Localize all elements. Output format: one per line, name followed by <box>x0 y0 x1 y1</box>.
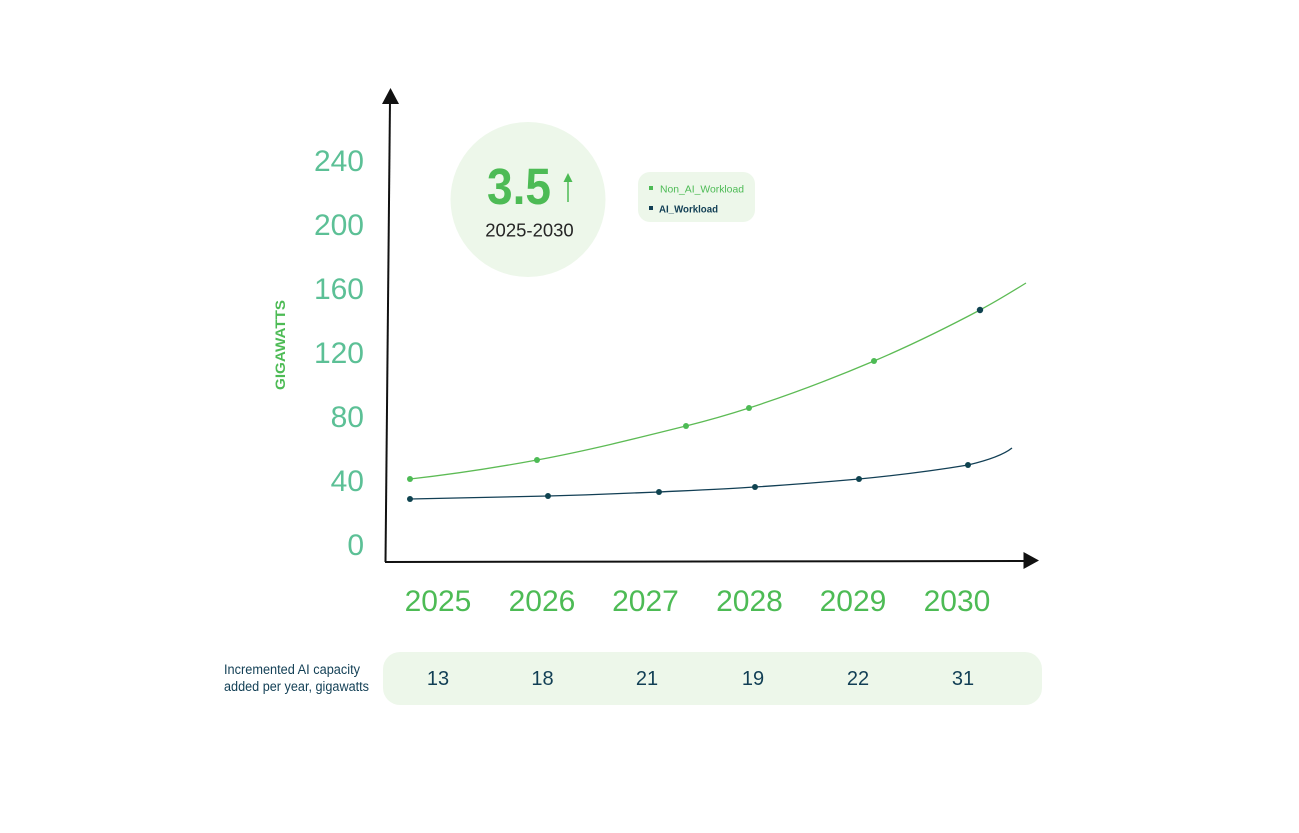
x axis year labels <box>405 585 990 618</box>
callout circle: 3.5x growth <box>450 122 606 277</box>
table row: incremented capacity values: 19 <box>742 668 764 690</box>
y axis labels: 40 <box>331 465 364 498</box>
y axis title: GIGAWATTS <box>273 300 288 390</box>
table row: incremented capacity values <box>383 652 1042 705</box>
y axis labels: 120 <box>314 337 364 370</box>
table row: incremented capacity values: 31 <box>952 668 974 690</box>
x axis year labels: 2028 <box>716 585 783 618</box>
x axis year labels: 2029 <box>820 585 886 618</box>
table row: incremented capacity values: 22 <box>847 668 869 690</box>
y axis labels <box>314 145 364 562</box>
y axis labels: 160 <box>314 273 364 306</box>
table row: incremented capacity values: 18 <box>531 668 554 690</box>
y axis labels: 240 <box>314 145 364 178</box>
y axis labels: 200 <box>314 209 364 242</box>
y axis arrow <box>382 88 399 562</box>
line: AI workload <box>407 448 1012 502</box>
table row label: Incremented AI capacity <box>224 662 360 677</box>
icon: up arrow <box>564 173 572 202</box>
legend <box>638 172 755 222</box>
table row: incremented capacity values: 21 <box>636 668 658 690</box>
legend: AI_Workload <box>659 204 718 216</box>
table row: incremented capacity values: 13 <box>427 668 449 690</box>
x axis year labels: 2030 <box>924 585 990 618</box>
table row label: added per year, gigawatts <box>224 679 369 694</box>
y axis labels: 80 <box>331 401 364 434</box>
x axis year labels: 2026 <box>509 585 575 618</box>
y axis labels: 0 <box>347 529 364 562</box>
callout circle: 3.5x growth: 2025-2030 <box>485 220 574 240</box>
x axis year labels: 2025 <box>405 585 471 618</box>
table row label <box>224 662 369 694</box>
line: non-AI workload <box>407 283 1026 482</box>
x axis year labels: 2027 <box>612 585 679 618</box>
callout circle: 3.5x growth: 3.5 <box>487 158 551 215</box>
legend: Non_AI_Workload <box>660 184 744 196</box>
x axis arrow <box>385 552 1039 569</box>
